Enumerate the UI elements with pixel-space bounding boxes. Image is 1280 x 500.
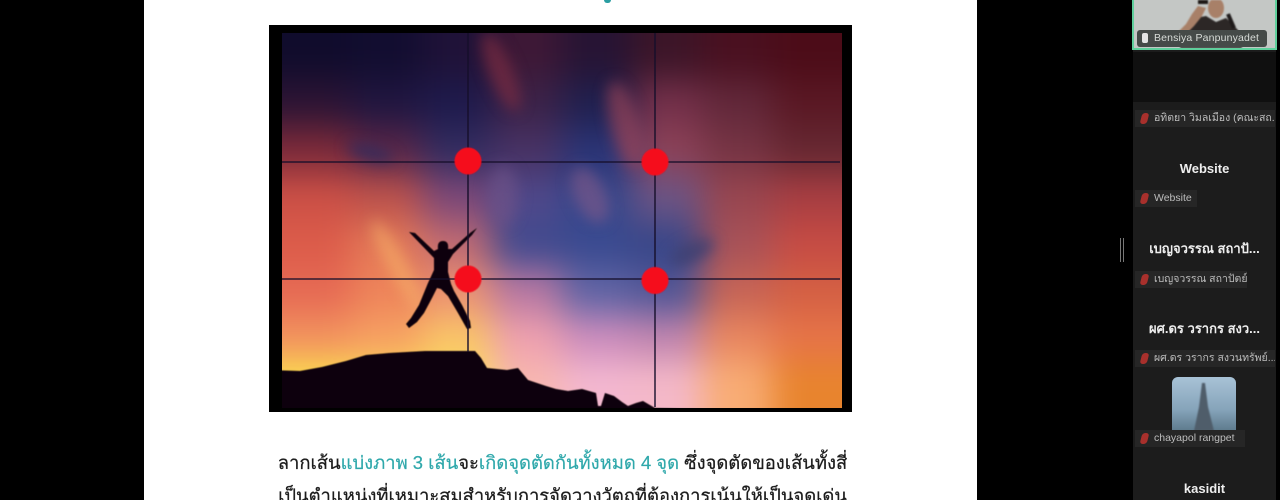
grid lines: [282, 33, 840, 407]
text block: explanation line 1: ลากเส้นแบ่งภาพ 3 เส้นจะเกิดจุดตัดกันทั้งหมด 4 จุด ซึ่งจุดตัดของเส้นทั้งสี่: [278, 452, 847, 473]
tile name: เบญจวรรณ สถาปั...: [1149, 241, 1260, 256]
name label: [1137, 30, 1267, 47]
name label: Bensiya Panpunyadet: [1154, 32, 1259, 44]
chart: rule of thirds sunset photo: [269, 25, 852, 412]
participant label: [1135, 350, 1275, 367]
participant label: chayapol: [1135, 430, 1245, 447]
sidebar resize handle: [1120, 238, 1124, 262]
tile name: kasidit: kasidit: [1184, 481, 1225, 496]
hill, figure, grid and points: [282, 33, 840, 408]
speaker figure: [1179, 0, 1243, 48]
panel: participants sidebar: [1133, 0, 1276, 500]
participant label: [1135, 110, 1275, 127]
participant label: chayapol: chayapol rangpet: [1154, 432, 1235, 444]
participant label: ผศ.ดร วรากร สงวนทรัพย์...: [1154, 352, 1275, 364]
cloud details: [345, 33, 720, 304]
participant label: Website: Website: [1154, 192, 1192, 204]
red intersection points: [454, 148, 668, 294]
heading fragment clipped at top: [604, 0, 611, 3]
sky and clouds: [282, 33, 842, 408]
jumping figure silhouette: [406, 228, 477, 329]
video tile: speaker: [1132, 0, 1277, 50]
tile name: Website: Website: [1180, 161, 1229, 176]
participant label: Website: [1135, 190, 1197, 207]
hill silhouette: [282, 350, 694, 408]
avatar: tower photo: [1172, 377, 1236, 430]
participant label: [1135, 271, 1247, 288]
participant label: เบญจวรรณ สถาปัตย์: [1154, 273, 1247, 285]
dark empty tile: [1133, 52, 1276, 102]
tile name: ผศ.ดร วรากร สงว...: [1149, 321, 1260, 336]
panel: white slide: [144, 0, 977, 500]
